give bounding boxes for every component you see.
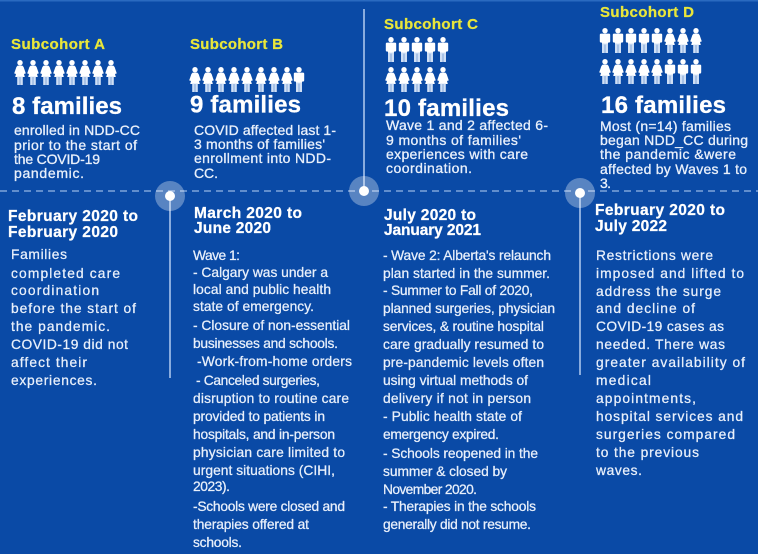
period text: summer & closed by — [383, 464, 507, 479]
icon: 10 family figures — [385, 37, 449, 92]
period text: 2023). — [193, 479, 230, 494]
period text: the pandemic. — [11, 319, 110, 334]
description: subcohort D: began NDD_CC during — [600, 132, 748, 148]
description: subcohort A — [14, 122, 140, 181]
description: subcohort C — [386, 117, 548, 176]
period text: provided to patients in — [193, 409, 325, 424]
description: subcohort C: Wave 1 and 2 affected 6- — [386, 117, 548, 133]
description: subcohort C: experiences with care — [386, 146, 528, 162]
description: subcohort A: prior to the start of — [14, 137, 137, 153]
heading: subcohort A: Subcohort A — [11, 36, 105, 53]
period text: and decline of — [596, 301, 695, 316]
period text: state of emergency. — [193, 299, 314, 314]
period heading — [595, 202, 725, 235]
description: subcohort D: affected by Waves 1 to — [600, 161, 747, 177]
period text: - Calgary was under a — [193, 265, 328, 280]
description: subcohort B — [194, 122, 336, 181]
period text: before the start of — [11, 301, 136, 316]
period text: COVID-19 did not — [11, 337, 128, 352]
period text: - Closure of non-essential — [193, 318, 350, 333]
period text: disruption to routine care — [193, 391, 349, 406]
period text: affect their — [11, 355, 87, 370]
period text: - Wave 2: Alberta's relaunch — [383, 248, 551, 263]
description: subcohort D: Most (n=14) families — [600, 118, 731, 134]
period text: therapies offered at — [193, 517, 309, 532]
period text: businesses and schools. — [193, 336, 338, 351]
description: subcohort D — [600, 118, 748, 191]
heading: subcohort C: Subcohort C — [384, 16, 478, 33]
period text: address the surge — [596, 284, 721, 299]
period text: medical — [596, 373, 651, 388]
period text: needed. There was — [596, 337, 725, 352]
description: subcohort B: COVID affected last 1- — [194, 122, 336, 138]
period text: greater availability of — [596, 355, 745, 370]
description: subcohort A: enrolled in NDD-CC — [14, 122, 140, 138]
period heading — [8, 208, 138, 241]
period text: - Public health state of — [383, 409, 522, 424]
period heading: February 2020 — [8, 224, 118, 241]
description: subcohort A: the COVID-19 — [14, 151, 100, 167]
count: 8 families: 8 families — [12, 93, 122, 120]
period text: care gradually resumed to — [383, 337, 544, 352]
period text: urgent situations (CIHI, — [193, 463, 335, 478]
period text — [193, 248, 352, 550]
description: subcohort B: 3 months of families' — [194, 136, 325, 152]
period heading: July 2022 — [595, 218, 667, 235]
timeline: dashed axis with markers — [0, 9, 758, 378]
count: 10 families: 10 families — [384, 95, 509, 122]
period heading: February 2020 to — [8, 208, 138, 225]
period heading: March 2020 to — [194, 205, 302, 222]
description: subcohort B: enrollment into NDD- — [194, 150, 331, 166]
period text — [595, 248, 745, 478]
description: subcohort D: the pandemic &were — [600, 146, 736, 162]
count: 9 families: 9 families — [190, 92, 301, 118]
period text: schools. — [193, 535, 242, 550]
panel: subcohort B — [189, 36, 336, 181]
period text: Restrictions were — [596, 248, 713, 263]
period text: delivery if not in person — [383, 391, 531, 406]
period text: plan started in the summer. — [383, 266, 550, 281]
period heading — [384, 207, 481, 239]
panel: period February 2020 to July 2022 — [595, 202, 745, 478]
period text: surgeries compared — [596, 427, 735, 442]
period heading: June 2020 — [194, 220, 271, 237]
period text: - Canceled surgeries, — [196, 373, 320, 388]
panel: period February 2020 to February 2020 — [8, 208, 138, 388]
period text: - Schools reopened in the — [383, 446, 538, 461]
description: subcohort B: CC. — [194, 165, 218, 181]
period text: Wave 1: — [193, 248, 240, 263]
description: subcohort C: 9 months of families' — [386, 132, 521, 148]
description: subcohort D: 3. — [600, 175, 611, 191]
period text: to the previous — [596, 445, 699, 460]
period text: -Work-from-home orders — [197, 354, 352, 369]
period text: hospital services and — [596, 409, 743, 424]
period text: coordination — [11, 283, 99, 298]
period text: waves. — [595, 463, 642, 478]
panel: subcohort D — [599, 4, 748, 191]
period text: services, & routine hospital — [383, 319, 544, 334]
period text: using virtual methods of — [383, 373, 528, 388]
panel: period July 2020 to January 2021 — [383, 207, 555, 532]
period text: emergency expired. — [383, 427, 499, 442]
period text: appointments, — [596, 391, 696, 406]
period text: generally did not resume. — [383, 517, 531, 532]
description: subcohort A: pandemic. — [14, 165, 84, 181]
period text: completed care — [11, 266, 120, 281]
panel: period March 2020 to June 2020 — [193, 205, 352, 550]
panel: subcohort C — [384, 16, 548, 176]
period heading: July 2020 to — [384, 207, 476, 224]
period text: experiences. — [11, 373, 97, 388]
period heading: February 2020 to — [595, 202, 725, 219]
period heading: January 2021 — [384, 222, 481, 239]
description: subcohort C: coordination. — [386, 160, 472, 176]
period text — [383, 248, 555, 532]
panel: subcohort A — [11, 36, 140, 181]
period text: COVID-19 cases as — [596, 319, 724, 334]
period text: imposed and lifted to — [596, 266, 744, 281]
period text: local and public health — [193, 282, 331, 297]
heading: subcohort B: Subcohort B — [190, 36, 283, 53]
period text: - Therapies in the schools — [383, 499, 536, 514]
period heading — [194, 205, 302, 237]
icon: 16 family figures — [599, 28, 702, 84]
period text: - Summer to Fall of 2020, — [383, 283, 533, 298]
count: 16 families: 16 families — [601, 92, 726, 119]
period text: November 2020. — [383, 482, 477, 497]
heading: subcohort D: Subcohort D — [600, 4, 694, 21]
period text: planned surgeries, physician — [383, 301, 555, 316]
period text: pre-pandemic levels often — [383, 355, 544, 370]
period text: hospitals, and in-person — [193, 427, 335, 442]
period text: Families — [11, 247, 67, 262]
period text: physician care limited to — [193, 445, 345, 460]
icon: 8 family figures — [14, 60, 117, 85]
icon: 9 family figures — [189, 67, 304, 92]
period text — [11, 247, 136, 388]
period text: -Schools were closed and — [193, 499, 345, 514]
